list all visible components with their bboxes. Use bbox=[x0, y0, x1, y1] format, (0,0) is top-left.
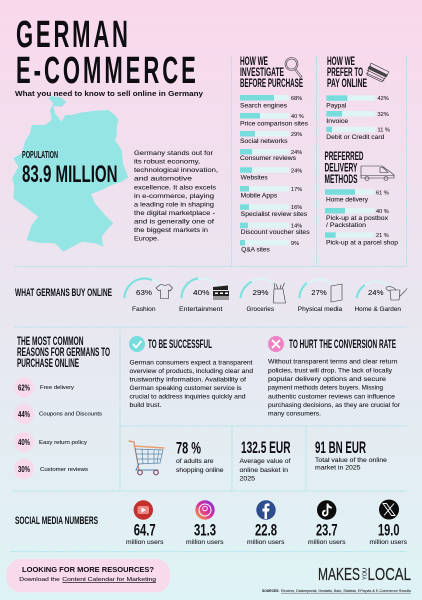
gauge: entertainment: Entertainment bbox=[179, 306, 223, 313]
gauge: entertainment bbox=[179, 278, 229, 313]
title: GERMAN bbox=[16, 13, 128, 56]
stat: Facebook: million users bbox=[247, 539, 284, 546]
panel: preferred delivery methods bbox=[324, 149, 399, 246]
sources: SOURCES: bbox=[262, 589, 280, 593]
stat: average basket: Average value of bbox=[240, 458, 291, 465]
gauge: fashion: 63% bbox=[136, 288, 152, 297]
bar chart: investigate: 24% bbox=[291, 168, 302, 174]
heading: delivery: DELIVERY bbox=[324, 160, 358, 174]
text: conversion body: popular delivery options and secure bbox=[268, 376, 387, 383]
title: E-COMMERCE bbox=[16, 49, 196, 92]
bar chart: investigate: 17% bbox=[291, 187, 302, 193]
stat: market value bbox=[315, 439, 388, 472]
stat: average basket bbox=[240, 439, 291, 482]
bar chart: payment: 32% bbox=[378, 112, 389, 118]
gauge: home and garden: 24% bbox=[368, 288, 384, 297]
stat: adults shopping online: 78 % bbox=[176, 440, 201, 458]
heading: social media: SOCIAL MEDIA NUMBERS bbox=[15, 515, 98, 527]
intro text: technological innovation, bbox=[134, 167, 218, 174]
bar chart: investigate: Q&A sites bbox=[241, 247, 270, 254]
reason: customer reviews: 30% bbox=[18, 464, 30, 474]
stat: X: million users bbox=[370, 539, 407, 546]
gauge: physical media: 27% bbox=[311, 288, 327, 297]
bar chart: investigate: 68% bbox=[291, 96, 302, 102]
stat: Facebook bbox=[247, 500, 284, 546]
logo: YOU bbox=[362, 568, 368, 580]
panel: how we investigate bbox=[240, 54, 310, 254]
bar chart: payment: 42% bbox=[378, 96, 389, 102]
subtitle: What you need to know to sell online in Germany bbox=[15, 89, 204, 98]
panel: reasons to purchase online bbox=[14, 336, 110, 479]
reason: coupons bbox=[14, 404, 102, 424]
title bbox=[16, 13, 196, 92]
text: success body bbox=[130, 360, 254, 409]
heading: reasons: PURCHASE ONLINE bbox=[17, 358, 79, 370]
intro text bbox=[134, 150, 218, 242]
text: conversion body: Without transparent terms and clear return bbox=[268, 359, 398, 366]
gauge: groceries bbox=[240, 279, 286, 313]
bar chart: delivery: 61 % bbox=[376, 190, 389, 196]
logo: MAKES bbox=[318, 564, 360, 584]
intro text: the digital marketplace - bbox=[134, 210, 215, 217]
icon: magnifier bbox=[285, 58, 302, 78]
callout: more resources bbox=[7, 559, 170, 592]
callout: more resources: LOOKING FOR MORE RESOURCES? bbox=[22, 565, 154, 574]
reason: free delivery: Free delivery bbox=[40, 385, 74, 391]
bar chart: investigate: 29% bbox=[291, 132, 302, 138]
map of Germany bbox=[12, 96, 128, 252]
text: conversion body: payment methods deters buyers. Missing bbox=[268, 385, 383, 392]
stat: market value: 91 BN EUR bbox=[315, 439, 366, 457]
bar chart: investigate bbox=[240, 95, 310, 254]
intro text: and automotive bbox=[134, 176, 193, 183]
panel: to hurt the conversion rate bbox=[268, 336, 400, 417]
bar chart: investigate: Discount voucher sites bbox=[241, 229, 310, 236]
heading: investigate: HOW WE bbox=[240, 54, 268, 68]
text: conversion body bbox=[268, 359, 400, 417]
bar chart: payment: Paypal bbox=[326, 102, 346, 109]
gauge: groceries: 29% bbox=[252, 288, 269, 297]
stat: Instagram bbox=[186, 500, 224, 546]
bar chart: investigate: Mobile Apps bbox=[241, 193, 277, 200]
text: success body: German speaking customer service is bbox=[130, 385, 242, 392]
reason: customer reviews: Customer reviews bbox=[40, 467, 88, 473]
bar chart: payment: Debit or Credit card bbox=[326, 134, 385, 141]
stat: market value: market in 2025 bbox=[315, 464, 361, 472]
bar chart: delivery: Pick-up at a postbox bbox=[326, 215, 389, 222]
stat: Facebook: 22.8 bbox=[255, 522, 277, 540]
population stat: 83.9 MILLION bbox=[22, 161, 118, 188]
text: success body: German consumers expect a transparent bbox=[130, 360, 253, 366]
stat: market value: Total value of the online bbox=[315, 457, 388, 464]
bar chart: investigate: Consumer reviews bbox=[240, 155, 296, 162]
heading: delivery: PREFERRED bbox=[324, 149, 364, 163]
bar chart: investigate: 14% bbox=[291, 224, 302, 230]
intro text: excellence. It also excels bbox=[134, 184, 216, 191]
intro text: the biggest markets in bbox=[134, 227, 209, 234]
intro text: Germany stands out for bbox=[134, 150, 213, 157]
text: success body: trustworthy information. Availability of bbox=[130, 377, 246, 384]
stat: YouTube: million users bbox=[126, 539, 164, 546]
population stat bbox=[22, 150, 118, 188]
heading: pay online bbox=[327, 54, 367, 90]
stat: YouTube: 64.7 bbox=[134, 522, 156, 540]
panel: to be successful bbox=[129, 336, 254, 409]
stat: adults shopping online: shopping online bbox=[176, 467, 224, 474]
stat: X: 19.0 bbox=[378, 522, 400, 540]
heading: pay online: HOW WE bbox=[327, 54, 355, 68]
heading: pay online: PREFER TO bbox=[327, 65, 363, 79]
stat: TikTok bbox=[308, 500, 346, 546]
reason: easy return: 40% bbox=[18, 437, 30, 447]
bar chart: investigate: Social networks bbox=[240, 138, 288, 145]
bar chart: delivery: 40 % bbox=[376, 209, 389, 215]
callout: more resources: Content Calendar for Marketing bbox=[62, 577, 156, 583]
panel: how we prefer to pay bbox=[326, 54, 390, 141]
text: success body: overview of products, including clear and bbox=[130, 368, 254, 375]
stat: TikTok: million users bbox=[308, 539, 346, 546]
text: conversion body: policies, trust will drop. The lack of locally bbox=[268, 367, 393, 374]
icon: check bbox=[129, 336, 145, 352]
icon: cross bbox=[268, 336, 284, 352]
stat: Instagram: million users bbox=[186, 539, 224, 546]
intro text: its robust economy, bbox=[134, 158, 200, 166]
stat: Instagram: 31.3 bbox=[194, 522, 216, 540]
bar chart: delivery bbox=[325, 189, 399, 246]
heading: investigate bbox=[240, 54, 303, 90]
stat: average basket: online basket in bbox=[240, 467, 289, 474]
stat: X bbox=[370, 500, 407, 546]
reason: free delivery: 62% bbox=[18, 382, 30, 392]
heading: pay online: PAY ONLINE bbox=[327, 76, 367, 90]
icon: shopping cart bbox=[129, 441, 164, 475]
reason: easy return: Easy return policy bbox=[39, 440, 87, 446]
heading: delivery bbox=[324, 149, 364, 186]
bar chart: investigate: Specialist review sites bbox=[241, 211, 307, 218]
reason: coupons: Coupons and Discounts bbox=[39, 412, 102, 418]
gauge: fashion: Fashion bbox=[132, 306, 156, 313]
gauge: physical media: Physical media bbox=[298, 306, 343, 313]
bar chart: payment bbox=[326, 95, 390, 141]
gauge: fashion bbox=[124, 278, 172, 313]
bar chart: delivery: 21 % bbox=[376, 233, 389, 239]
icon: credit cards bbox=[366, 63, 389, 82]
bar chart: delivery: Pick-up at a parcel shop bbox=[326, 239, 399, 246]
stat: average basket: 132.5 EUR bbox=[241, 439, 291, 457]
stat: average basket: 2025 bbox=[240, 476, 256, 482]
text: success body: build trust. bbox=[130, 402, 162, 409]
reason: free delivery bbox=[14, 378, 74, 398]
callout: more resources: Download the bbox=[19, 577, 60, 583]
bar chart: investigate: Search engines bbox=[240, 102, 287, 110]
heading: to be successful: TO BE SUCCESSFUL bbox=[148, 339, 212, 351]
panel: social media numbers bbox=[15, 500, 407, 546]
heading: reasons: THE MOST COMMON bbox=[17, 336, 84, 348]
stat: YouTube bbox=[126, 500, 164, 546]
stat: adults shopping online bbox=[129, 440, 224, 475]
population stat: POPULATION bbox=[22, 150, 58, 161]
intro text: in e-commerce, playing bbox=[134, 193, 215, 200]
heading: investigate: BEFORE PURCHASE bbox=[240, 76, 303, 90]
intro text: and is generally one of bbox=[134, 218, 214, 226]
bar chart: payment: 11 % bbox=[378, 128, 390, 134]
text: conversion body: authentic customer reviews can influence bbox=[268, 393, 396, 400]
text: conversion body: many consumers. bbox=[268, 410, 321, 417]
gauge: home and garden bbox=[354, 281, 407, 313]
bar chart: payment: Invoice bbox=[326, 118, 349, 125]
reason: coupons: 44% bbox=[18, 409, 30, 419]
bar chart: investigate: 9% bbox=[291, 241, 299, 247]
heading: buy online: WHAT GERMANS BUY ONLINE bbox=[15, 287, 112, 299]
bar chart: investigate: 24% bbox=[291, 150, 302, 156]
icon: clapperboard bbox=[213, 286, 229, 300]
gauge: physical media bbox=[298, 280, 343, 313]
heading: delivery: METHODS bbox=[324, 172, 358, 186]
bar chart: delivery: / Packstation bbox=[326, 222, 367, 229]
sources: Reuters, Datareportal, Destatis, Bsto, Statista, EPayvia & E-Commerce Results bbox=[281, 589, 411, 593]
text: success body: crucial to address inquiries quickly and bbox=[130, 394, 246, 401]
stat: adults shopping online: of adults are bbox=[176, 458, 214, 465]
stat: TikTok: 23.7 bbox=[316, 522, 338, 540]
icon: delivery van bbox=[361, 166, 394, 180]
heading: reasons: REASONS FOR GERMANS TO bbox=[17, 347, 110, 359]
panel: what Germans buy online bbox=[15, 278, 407, 313]
reason: customer reviews bbox=[14, 459, 88, 479]
text: conversion body: purchasing decisions, as they are crucial for bbox=[268, 402, 400, 409]
heading: reasons bbox=[17, 336, 110, 370]
heading: investigate: INVESTIGATE bbox=[240, 65, 284, 79]
bar chart: investigate: 40 % bbox=[291, 114, 304, 120]
intro text: a leading role in shaping bbox=[134, 202, 215, 208]
reason: easy return bbox=[14, 432, 87, 452]
logo bbox=[318, 564, 411, 584]
bar chart: investigate: Price comparison sites bbox=[240, 121, 308, 128]
gauge: entertainment: 40% bbox=[193, 288, 210, 297]
gauge: home and garden: Home & Garden bbox=[354, 306, 402, 313]
bar chart: investigate: Websites bbox=[241, 174, 268, 181]
gauge: groceries: Groceries bbox=[246, 306, 274, 313]
intro text: Europe. bbox=[134, 236, 159, 242]
bar chart: investigate: 16% bbox=[291, 205, 302, 211]
bar chart: delivery: Home delivery bbox=[326, 197, 369, 204]
